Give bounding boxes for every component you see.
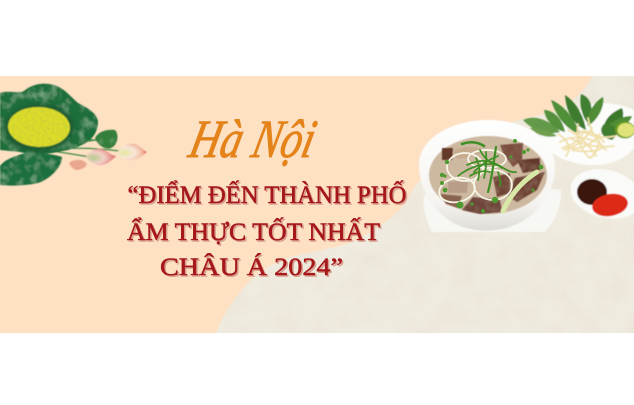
scallion stalk xyxy=(503,172,537,211)
headline xyxy=(127,180,408,282)
textured paper shape xyxy=(216,76,634,333)
lotus bud small xyxy=(69,160,87,170)
headline line 3: CHÂU Á 2024” xyxy=(160,253,343,281)
headline line 2: ẨM THỰC TỐT NHẤT xyxy=(127,217,380,246)
dish xyxy=(565,162,634,226)
lotus bud middle xyxy=(86,149,116,165)
bean sprouts xyxy=(558,118,616,158)
bowl body xyxy=(419,120,555,230)
lower lotus leaf xyxy=(0,153,62,186)
white plate xyxy=(540,103,634,165)
chili sauce xyxy=(590,191,630,219)
upper lotus leaf xyxy=(0,84,98,154)
headline line 1: “ĐIỂM ĐẾN THÀNH PHỐ xyxy=(129,182,408,210)
herb leaves xyxy=(523,94,632,140)
background band xyxy=(0,76,634,333)
lime wedge xyxy=(615,122,634,138)
stems xyxy=(52,140,120,157)
headline line 1: “ĐIỂM ĐẾN THÀNH PHỐ xyxy=(128,180,406,209)
scallions xyxy=(458,142,516,192)
headline line 2: ẨM THỰC TỐT NHẤT xyxy=(128,218,382,248)
lotus bud right xyxy=(117,144,147,160)
headline line 3: CHÂU Á 2024” xyxy=(162,254,344,282)
onion rings xyxy=(437,150,512,205)
lotus illustration xyxy=(0,84,147,186)
plate with herbs and bean sprouts xyxy=(523,94,634,165)
saucer xyxy=(424,188,561,232)
broth xyxy=(429,136,547,214)
green onion bits xyxy=(440,139,543,213)
pho bowl xyxy=(419,120,561,232)
lotus seed pod xyxy=(7,106,71,148)
pod shadow xyxy=(3,102,75,154)
city name: Hà Nội xyxy=(183,109,322,169)
hoisin sauce xyxy=(577,179,607,205)
beef slices xyxy=(440,143,545,214)
sauce dish xyxy=(565,162,634,226)
green bud xyxy=(95,130,117,149)
